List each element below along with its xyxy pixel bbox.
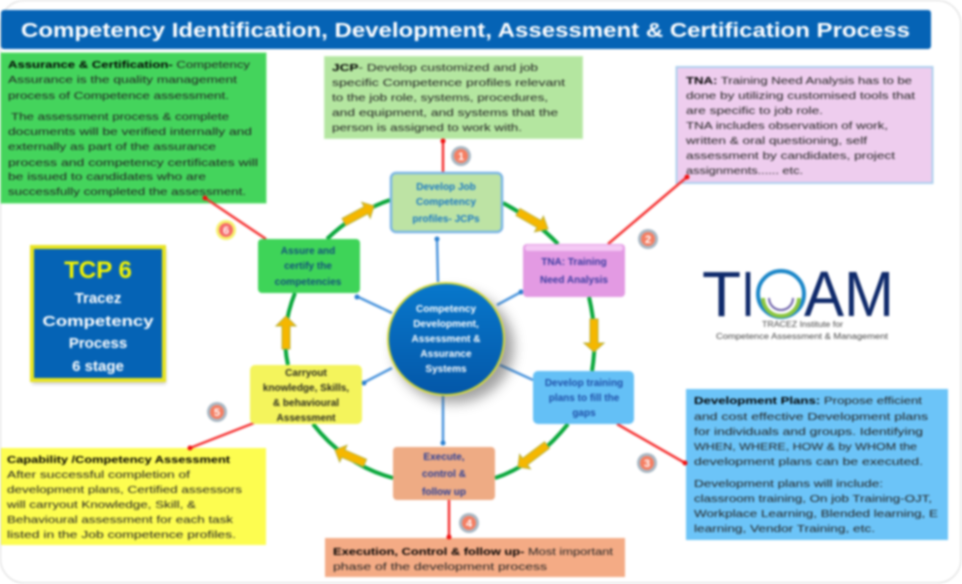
node: develop training plans xyxy=(533,371,634,424)
panel: development plans xyxy=(686,389,948,540)
red connector lines xyxy=(188,138,690,540)
panel: assurance and certification xyxy=(1,53,266,203)
logo: TICAM: TRACEZ Institute for xyxy=(762,320,843,329)
panel: TNA: TNA: Training Need Analysis has to be xyxy=(686,75,912,87)
logo: TICAM: Competence Assessment & Management xyxy=(716,332,889,341)
panel: TNA: assessment by candidates, project xyxy=(686,150,895,162)
panel: assurance and certification: externally as part of the assurance xyxy=(8,141,216,153)
badge 2 xyxy=(638,229,658,249)
logo: TICAM: T xyxy=(702,258,741,330)
panel: TCP 6: Process xyxy=(69,335,127,352)
logo: TICAM: I xyxy=(741,258,755,330)
panel: TNA: written & oral questioning, self xyxy=(685,135,867,147)
badge 3: 3 xyxy=(644,458,650,470)
stage number badges xyxy=(207,146,658,533)
node: execute, control and follow up: control & xyxy=(422,469,466,480)
badge 6 xyxy=(216,220,236,240)
panel: JCP xyxy=(324,56,582,138)
node: develop job competency profiles: profiles- JCPs xyxy=(412,214,480,225)
panel: JCP: to the job role, systems, procedures, xyxy=(332,92,548,104)
badge 5 xyxy=(207,402,227,422)
panel: JCP: JCP - Develop customized and job xyxy=(332,62,538,74)
panel: assurance and certification: successfully completed the assessment. xyxy=(8,186,246,198)
panel: capability and competency assessment xyxy=(1,448,266,545)
panel: development plans: Workplace Learning, Blended learning, E xyxy=(694,508,938,520)
panel: development plans: Development plans will include: xyxy=(694,478,883,490)
node: execute, control and follow up xyxy=(393,447,495,500)
node: assure and certify xyxy=(258,239,360,293)
arrow: TNA to development xyxy=(584,319,604,352)
panel: TNA: TNA includes observation of work, xyxy=(686,120,888,132)
panel: assurance and certification: Assurance & Certification- Competency xyxy=(8,59,251,71)
hub: competency systems: Assessment & xyxy=(412,334,480,345)
panel: assurance and certification: Assurance is the quality management xyxy=(8,74,237,86)
panel: development plans: and cost effective Development plans xyxy=(694,411,928,423)
panel: assurance and certification: The assessment process & complete xyxy=(11,111,229,123)
hub: competency systems: Assurance xyxy=(420,349,472,360)
hub: competency systems xyxy=(388,283,514,403)
panel: development plans: Development Plans: Propose efficient xyxy=(694,395,922,407)
arrow: assure to JCP xyxy=(342,202,374,226)
blue spokes from hub xyxy=(354,236,533,446)
badge 2: 2 xyxy=(645,234,651,246)
panel: capability and competency assessment: Capability /Competency Assessment xyxy=(7,454,231,466)
hub: competency systems: Competency xyxy=(416,304,476,315)
node: develop training plans: Develop training xyxy=(545,378,623,389)
panel: capability and competency assessment: After successful completion of xyxy=(7,469,190,481)
node: assure and certify: Assure and xyxy=(281,246,335,257)
panel: capability and competency assessment: listed in the Job competence profiles. xyxy=(7,529,236,541)
node: TNA training need analysis: TNA: Training xyxy=(541,257,607,268)
panel: execution, control and follow up: phase of the development process xyxy=(333,561,547,573)
node: assure and certify: competencies xyxy=(275,277,342,288)
badge 6: 6 xyxy=(223,225,229,237)
panel: development plans: learning, Vendor Training, etc. xyxy=(694,523,875,535)
panel: JCP: and equipment, and systems that the xyxy=(332,107,558,119)
panel: development plans: WHEN, WHERE, HOW & by WHOM the xyxy=(694,441,917,453)
node: TNA training need analysis xyxy=(523,244,625,297)
node: TNA training need analysis: Need Analysis xyxy=(540,275,608,286)
panel: capability and competency assessment: Behavioural assessment for each task xyxy=(7,514,234,526)
badge 5: 5 xyxy=(214,407,220,419)
panel: JCP: person is assigned to work with. xyxy=(332,122,522,134)
node: carry out assessment: Assessment xyxy=(277,413,336,424)
arrow: development to execute xyxy=(518,442,549,469)
node: carry out assessment: Carryout xyxy=(285,368,328,379)
node: develop job competency profiles: Competency xyxy=(416,197,476,208)
title banner xyxy=(1,10,931,49)
arrow: JCP to TNA xyxy=(516,208,548,232)
node: develop training plans: plans to fill the xyxy=(549,393,620,404)
node: assure and certify: certify the xyxy=(284,261,332,272)
panel: execution, control and follow up: Execution, Control & follow up- Most important xyxy=(333,546,613,558)
badge 4 xyxy=(459,513,479,533)
panel: TNA: assignments...... etc. xyxy=(686,165,803,177)
node: develop job competency profiles: Develop Job xyxy=(416,182,476,193)
badge 3 xyxy=(637,453,657,473)
badge 1 xyxy=(451,146,471,166)
panel: TNA: are specific to job role. xyxy=(686,105,823,117)
panel: capability and competency assessment: development plans, Certified assessors xyxy=(7,484,242,496)
panel: development plans: development plans can be executed. xyxy=(694,456,923,468)
panel: TNA: done by utilizing customised tools that xyxy=(686,90,915,102)
panel: execution, control and follow up xyxy=(325,538,625,577)
node: develop training plans: gaps xyxy=(572,408,596,419)
panel: TCP 6: Tracez xyxy=(75,290,121,307)
node: carry out assessment: knowledge, Skills, xyxy=(263,383,349,394)
title banner: Competency Identification, Development, Assessment & Certification Process xyxy=(21,20,910,42)
node: execute, control and follow up: follow up xyxy=(422,487,466,498)
panel: TCP 6: TCP 6 xyxy=(64,257,132,284)
panel: TNA xyxy=(676,67,932,183)
logo ring xyxy=(758,271,804,317)
panel: capability and competency assessment: will carryout Knowledge, Skill, & xyxy=(6,499,196,511)
panel: assurance and certification: documents will be verified internally and xyxy=(8,126,252,138)
panel: TCP 6 xyxy=(32,247,166,384)
panel: assurance and certification: process of Competence assessment. xyxy=(8,90,229,102)
panel: assurance and certification: process and competency certificates will xyxy=(8,157,258,169)
panel: assurance and certification: be issued to candidates who are xyxy=(8,171,206,183)
panel: TCP 6: Competency xyxy=(42,313,154,330)
logo: TICAM: AM xyxy=(804,258,894,330)
node: carry out assessment: & behavioural xyxy=(273,398,339,409)
panel: JCP: specific Competence profiles relevant xyxy=(332,77,565,89)
hub: competency systems: Systems xyxy=(425,364,467,375)
hub: competency systems: Development, xyxy=(413,319,479,330)
badge 1: 1 xyxy=(458,151,464,163)
arrow: execute to carry out xyxy=(335,445,367,467)
arrow: carry out to assure xyxy=(276,316,296,349)
node: develop job competency profiles xyxy=(391,173,502,232)
panel: TCP 6: 6 stage xyxy=(72,358,124,375)
node: execute, control and follow up: Execute, xyxy=(423,452,465,463)
panel: development plans: for individuals and groups. Identifying xyxy=(694,426,923,438)
node: carry out assessment xyxy=(250,365,362,424)
panel: development plans: classroom training, On job Training-OJT, xyxy=(694,493,932,505)
green process ring with arrows xyxy=(276,200,604,478)
badge 4: 4 xyxy=(466,518,473,530)
logo: TICAM xyxy=(702,258,894,341)
